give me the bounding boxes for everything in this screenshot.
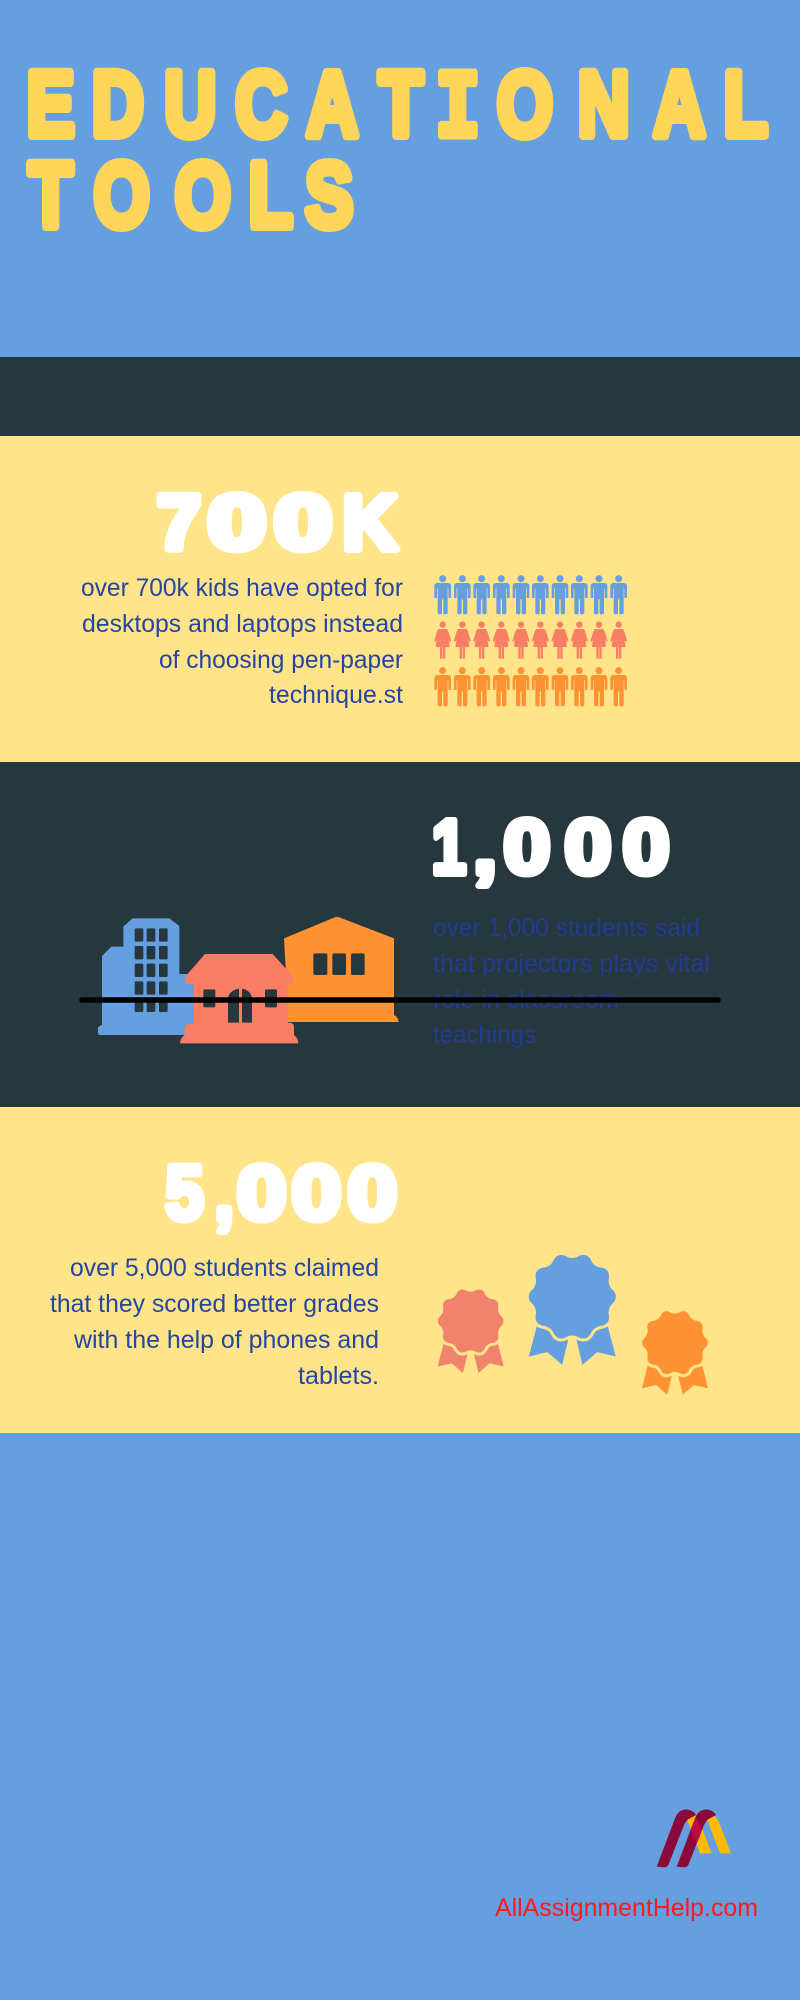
text block: 1,000 description: teachings [433, 1021, 536, 1049]
text block: 1,000 description: over 1,000 students said [433, 914, 700, 942]
heading: 700K: K [343, 480, 397, 566]
title: TOOLS [29, 144, 353, 247]
black line across panel [82, 997, 718, 1003]
icon: blue tower [98, 918, 193, 1035]
text block: 5,000 description: tablets. [298, 1362, 379, 1390]
heading: 700K [157, 480, 397, 566]
icon row: orange men [434, 667, 627, 706]
panel: 5,000 statistic [0, 1107, 800, 1433]
text block: 5,000 description: that they scored better grades [50, 1290, 379, 1318]
icon: coral school [180, 954, 298, 1043]
title: EDUCATIONAL [27, 53, 768, 164]
title [27, 53, 768, 247]
pictogram: people rows [434, 575, 627, 706]
icon: logo [657, 1809, 731, 1867]
icon: blue medal [527, 1253, 617, 1365]
heading: 5,000 [165, 1150, 397, 1236]
heading: 1,000: 1 [432, 804, 466, 890]
text block: 1,000 description [433, 914, 710, 1049]
panel: footer [0, 1433, 800, 2000]
text block: 700k description: desktops and laptops instead [82, 610, 403, 638]
icon row: blue men [434, 575, 627, 614]
icon row: coral women [434, 621, 627, 659]
icon: buildings [98, 917, 399, 1043]
brand text: AllAssignmentHelp.com [495, 1894, 758, 1922]
heading: 700K: 00 [208, 480, 332, 566]
heading: 1,000: ,000 [473, 805, 669, 891]
panel: 700K statistic [0, 436, 800, 762]
text block: 700k description: over 700k kids have opted for [81, 574, 403, 602]
text block: 5,000 description [50, 1254, 379, 1390]
dark divider band [0, 357, 800, 436]
text block: 1,000 description: role in classroom [433, 986, 619, 1014]
heading: 5,000: 000 [237, 1150, 397, 1236]
panel: 1,000 statistic [0, 762, 800, 1107]
icon: orange hall [284, 917, 399, 1022]
icon: orange medal [641, 1310, 709, 1395]
text block: 1,000 description: that projectors plays vital [433, 950, 710, 978]
text block: 700k description: technique.st [269, 681, 403, 709]
heading: 700K: 7 [157, 481, 201, 566]
heading: 5,000: 5, [165, 1150, 234, 1236]
text block: 5,000 description: with the help of phones and [73, 1326, 379, 1354]
text block: 700k description [81, 574, 403, 709]
panel: title header [0, 0, 800, 357]
text block: 5,000 description: over 5,000 students claimed [70, 1254, 379, 1282]
icon: coral medal [436, 1288, 505, 1373]
text block: 700k description: of choosing pen-paper [159, 646, 403, 674]
